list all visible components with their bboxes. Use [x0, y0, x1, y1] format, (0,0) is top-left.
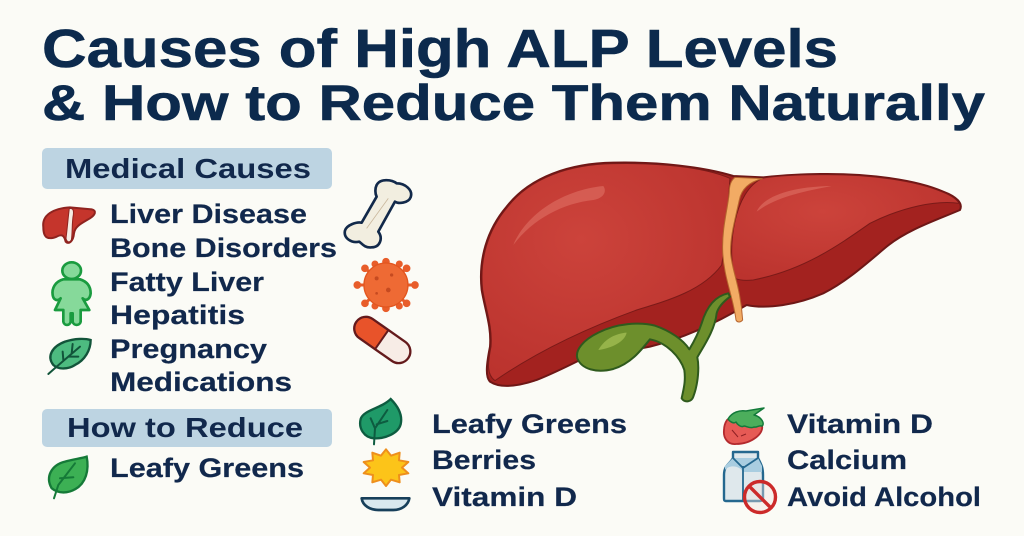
- list: column two: [432, 409, 627, 512]
- heading: how to reduce: How to Reduce: [67, 412, 303, 443]
- title: [42, 19, 985, 131]
- heading: how to reduce: [42, 409, 332, 447]
- icon: sun: [364, 449, 408, 486]
- list: column one: Leafy Greens: [110, 453, 304, 483]
- icon: woman figure: [52, 262, 91, 325]
- list: medical causes: Liver Disease: [110, 199, 307, 229]
- panel: medical causes: [42, 148, 417, 397]
- heading: medical causes: [42, 148, 332, 189]
- gallbladder and duct: [577, 293, 730, 401]
- icon: bowl: [362, 498, 409, 510]
- liver body: [481, 163, 961, 386]
- icon: dark leaf: [360, 399, 401, 444]
- panel: how to reduce: [42, 399, 981, 512]
- icon: bone: [345, 180, 411, 247]
- list: medical causes: [110, 199, 337, 397]
- left lobe surface: [482, 164, 730, 381]
- list: column three: Calcium: [787, 445, 907, 475]
- highlights: [513, 186, 605, 245]
- heading: medical causes: Medical Causes: [65, 153, 311, 184]
- icon: milk carton with no symbol: [724, 452, 776, 512]
- icon: small liver: [43, 207, 95, 243]
- icon: virus: [355, 259, 417, 311]
- icon: green leaf: [49, 457, 88, 498]
- icon: leaf outline: [48, 339, 91, 374]
- title: & How to Reduce Them Naturally: [42, 75, 985, 131]
- list: medical causes: Bone Disorders: [110, 233, 337, 263]
- gallbladder highlight: [598, 333, 627, 350]
- title: Causes of High ALP Levels: [42, 19, 838, 79]
- list: column three: Vitamin D: [787, 409, 933, 439]
- list: column two: Berries: [432, 445, 536, 475]
- right lobe surface: [732, 175, 959, 280]
- list: medical causes: Pregnancy: [110, 334, 267, 364]
- list: column two: Vitamin D: [432, 482, 577, 512]
- list: medical causes: Fatty Liver: [110, 267, 264, 297]
- illustration: liver and gallbladder: [481, 163, 961, 401]
- list: medical causes: Medications: [110, 367, 292, 397]
- list: column three: [787, 409, 981, 512]
- list: column three: Avoid Alcohol: [787, 482, 981, 512]
- icon: strawberry: [724, 408, 764, 444]
- list: column two: Leafy Greens: [432, 409, 627, 439]
- icon: capsule: [350, 312, 415, 368]
- list: medical causes: Hepatitis: [110, 300, 245, 330]
- falciform ligament: [723, 177, 763, 322]
